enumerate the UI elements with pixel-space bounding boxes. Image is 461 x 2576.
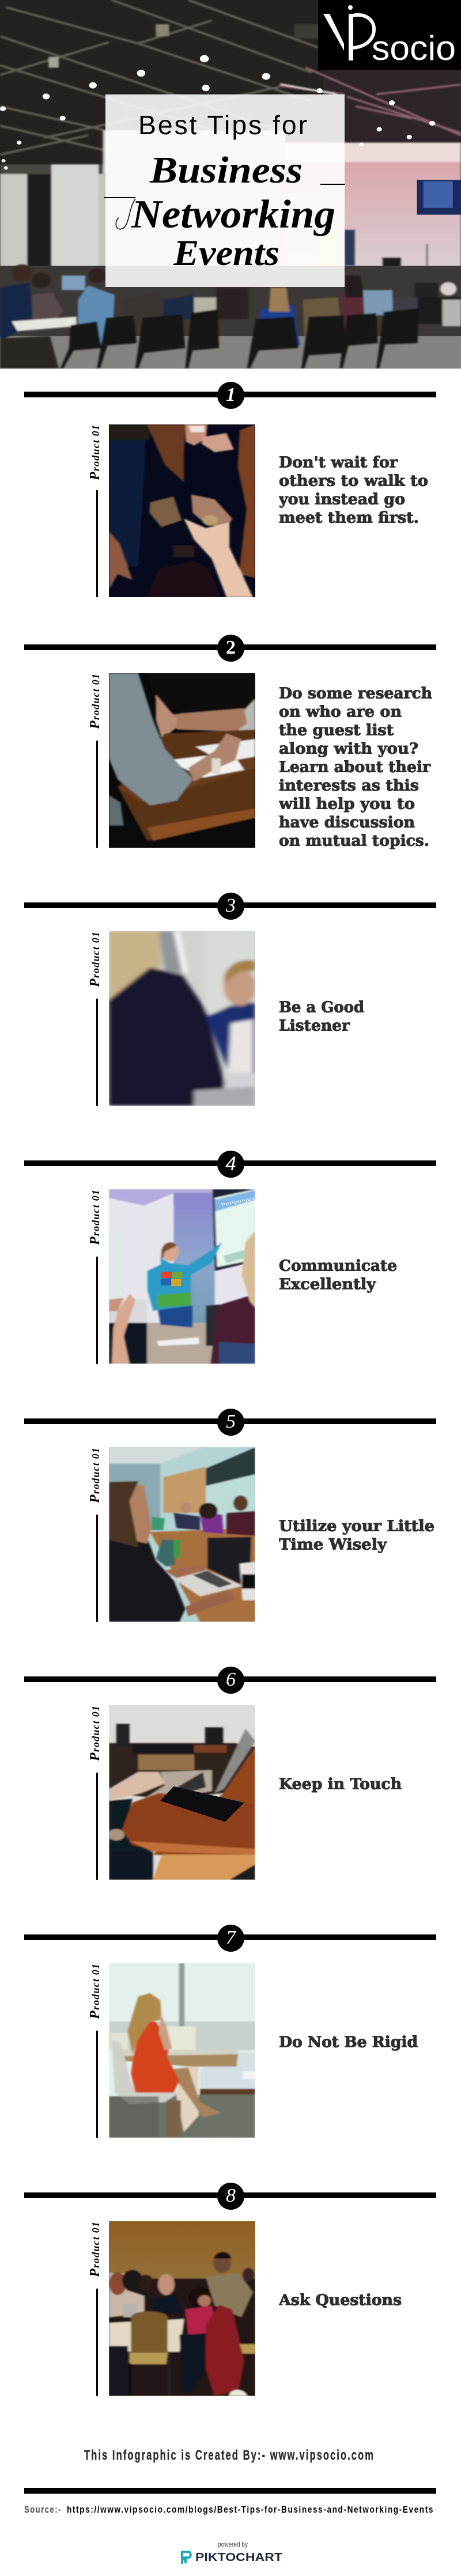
number badge 2: 2 — [226, 637, 236, 658]
number badge 7: 7 — [226, 1927, 236, 1948]
photo: two men at table — [109, 673, 255, 848]
product label: Product 01 — [88, 1706, 103, 1762]
number badge 4 — [217, 1151, 244, 1178]
powered by Piktochart: PIKTOCHART — [195, 2551, 282, 2564]
title: Business: Business — [149, 149, 303, 191]
photo: two women talking — [109, 931, 255, 1106]
tip text: Listener — [279, 1017, 350, 1034]
number badge 6: 6 — [226, 1669, 236, 1690]
photo: boardroom meeting — [109, 1447, 255, 1622]
tip text: Don't wait for — [279, 454, 398, 471]
number badge 8: 8 — [226, 2185, 236, 2206]
panel: tip 2 — [24, 635, 436, 850]
tip text: Do some research — [279, 685, 432, 703]
tip text: meet them first. — [279, 509, 419, 526]
logo: VIP socio — [318, 0, 461, 70]
number badge 4: 4 — [225, 1153, 236, 1175]
title: Events: Events — [173, 234, 279, 273]
tip text: Learn about their — [279, 759, 430, 776]
tip text — [279, 999, 364, 1034]
panel: tip 7 — [24, 1925, 436, 2138]
powered by Piktochart: powered by — [218, 2540, 248, 2548]
photo: laptop and phone on desk — [109, 1705, 255, 1880]
panel: tip 5 — [24, 1409, 436, 1622]
number badge 2 — [217, 635, 244, 662]
title: Networking: Networking — [131, 192, 335, 237]
tip text: will help you to — [279, 796, 415, 813]
photo: audience with question — [109, 2221, 255, 2396]
product label: Product 01 — [88, 2222, 103, 2278]
tip text — [279, 454, 428, 526]
number badge 3 — [217, 893, 244, 920]
tip text: on who are on — [279, 704, 402, 721]
product label: Product 01 — [88, 425, 103, 481]
tip text: Communicate — [279, 1258, 397, 1275]
product label: Product 01 — [88, 1448, 103, 1504]
product label: Product 01 — [88, 674, 103, 730]
tip text: Be a Good — [279, 999, 364, 1016]
tip text: others to walk to — [279, 472, 428, 490]
number badge 8 — [217, 2183, 244, 2210]
number badge 1: 1 — [226, 384, 236, 405]
powered by Piktochart — [181, 2540, 282, 2564]
hero photo: conference room — [0, 0, 461, 369]
source line: Source:- — [24, 2504, 62, 2515]
tip text: along with you? — [279, 741, 418, 758]
tip text — [279, 1258, 397, 1293]
tip text: on mutual topics. — [279, 833, 429, 850]
number badge 7 — [217, 1925, 244, 1952]
photo: presenter at screen — [109, 1189, 255, 1364]
tip text: Time Wisely — [279, 1537, 387, 1554]
tip text: Do Not Be Rigid — [279, 2034, 418, 2051]
title box — [104, 94, 345, 287]
title: Best Tips for: Best Tips for — [138, 110, 309, 140]
tip text: Keep in Touch — [279, 1776, 402, 1793]
tip text — [279, 1518, 434, 1554]
panel: tip 1 — [24, 382, 436, 597]
tip text: have discussion — [279, 814, 415, 832]
photo: women with drinks — [109, 424, 255, 597]
panel: tip 6 — [24, 1667, 436, 1880]
number badge 3: 3 — [226, 895, 236, 916]
tip text: interests as this — [279, 777, 419, 795]
product label: Product 01 — [88, 1964, 103, 2020]
product label: Product 01 — [88, 932, 103, 988]
panel: tip 8 — [24, 2183, 436, 2396]
number badge 6 — [217, 1667, 244, 1694]
number badge 5: 5 — [226, 1411, 236, 1432]
product label: Product 01 — [88, 1190, 103, 1246]
tip text: Ask Questions — [279, 2292, 402, 2309]
number badge 5 — [217, 1409, 244, 1436]
tip text: the guest list — [279, 722, 394, 739]
tip text: you instead go — [279, 491, 405, 508]
tip text: Utilize your Little — [279, 1518, 434, 1535]
tip text: Excellently — [279, 1276, 376, 1293]
photo: woman in red dress at window — [109, 1963, 255, 2138]
panel: tip 4 — [24, 1151, 436, 1364]
panel: tip 3 — [24, 893, 436, 1106]
logo: VIP socio: socio — [372, 29, 456, 67]
tip text — [279, 685, 432, 850]
number badge 1 — [217, 382, 244, 409]
